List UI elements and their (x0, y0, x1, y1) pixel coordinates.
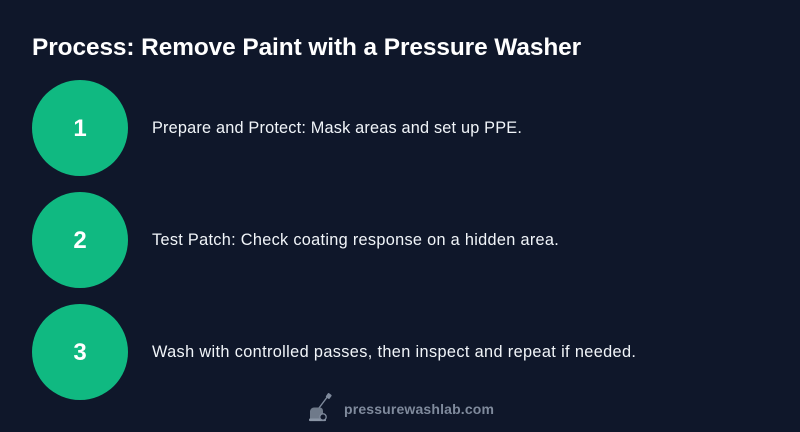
step 2 number badge (32, 192, 128, 288)
step 2 text: Test Patch: Check coating response on a hidden area. (152, 231, 559, 249)
step 2 (32, 192, 559, 288)
step 2 number badge: 2 (73, 227, 87, 254)
title: Process: Remove Paint with a Pressure Washer (32, 34, 581, 61)
step 3 number badge: 3 (73, 339, 87, 366)
icon: pressure washer (309, 393, 332, 422)
footer brand (309, 393, 494, 422)
step 1 number badge (32, 80, 128, 176)
step 1 (32, 80, 522, 176)
step 3 text: Wash with controlled passes, then inspect and repeat if needed. (152, 343, 636, 361)
website name: pressurewashlab.com (344, 401, 494, 417)
step 3 number badge (32, 304, 128, 400)
step 1 number badge: 1 (73, 115, 87, 142)
step 3 (32, 304, 636, 400)
step 1 text: Prepare and Protect: Mask areas and set up PPE. (152, 119, 522, 137)
